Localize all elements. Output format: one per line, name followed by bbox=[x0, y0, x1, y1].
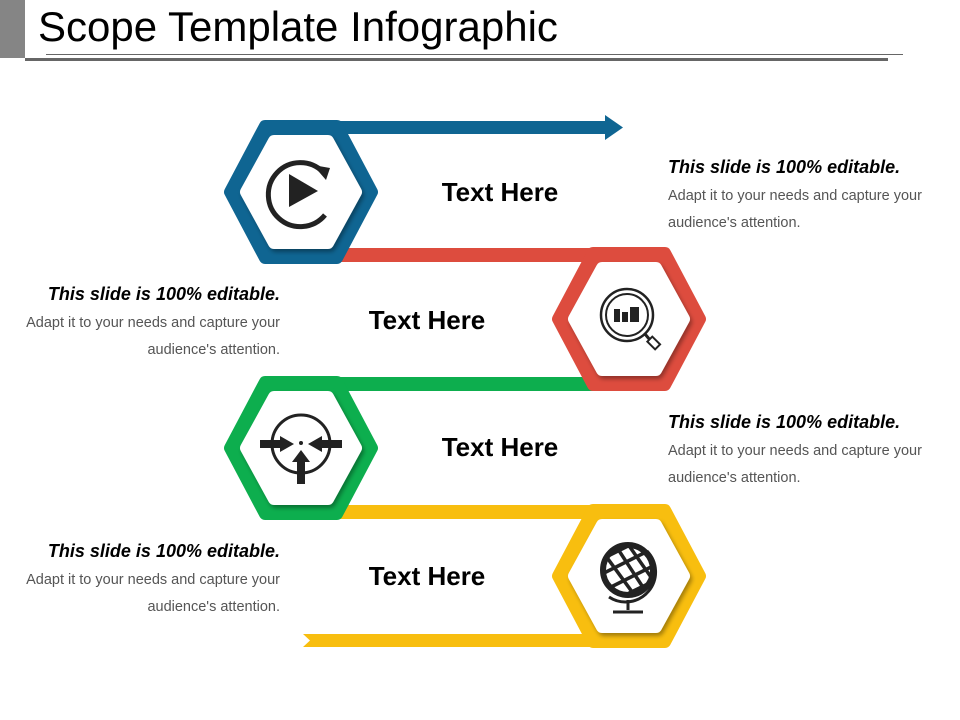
title: Scope Template Infographic bbox=[38, 3, 558, 50]
description 2: Adapt it to your needs and capture your audience's attention. bbox=[26, 315, 280, 358]
hexagon 2 red bbox=[558, 253, 700, 385]
label 3: Text Here bbox=[442, 432, 558, 462]
band: yellow bottom tail bbox=[303, 634, 600, 647]
description 1 bbox=[668, 157, 922, 231]
band: yellow bbox=[330, 505, 600, 519]
label 1: Text Here bbox=[442, 177, 558, 207]
label 4: Text Here bbox=[369, 561, 485, 591]
title bar accent bbox=[0, 0, 25, 58]
icon: globe bbox=[600, 540, 660, 612]
description 2: This slide is 100% editable. bbox=[48, 284, 280, 304]
description 3 bbox=[668, 412, 922, 486]
band: green bbox=[330, 377, 600, 391]
description 4: This slide is 100% editable. bbox=[48, 541, 280, 561]
description 4: Adapt it to your needs and capture your audience's attention. bbox=[26, 572, 280, 615]
description 2 bbox=[26, 284, 280, 358]
diagram bbox=[224, 115, 706, 648]
description 4 bbox=[26, 541, 280, 615]
label 2: Text Here bbox=[369, 305, 485, 335]
icon: replay bbox=[268, 163, 330, 227]
icon: target arrows bbox=[260, 415, 342, 484]
hexagon 4 yellow bbox=[558, 510, 700, 642]
description 1: Adapt it to your needs and capture your audience's attention. bbox=[668, 188, 922, 231]
arrow: blue top bbox=[330, 115, 623, 140]
icon: magnifier chart bbox=[601, 289, 660, 349]
hexagon 3 green bbox=[230, 382, 372, 514]
hexagon 1 blue bbox=[230, 126, 372, 258]
band: red bbox=[330, 248, 600, 262]
description 3: Adapt it to your needs and capture your audience's attention. bbox=[668, 443, 922, 486]
description 1: This slide is 100% editable. bbox=[668, 157, 900, 177]
description 3: This slide is 100% editable. bbox=[668, 412, 900, 432]
